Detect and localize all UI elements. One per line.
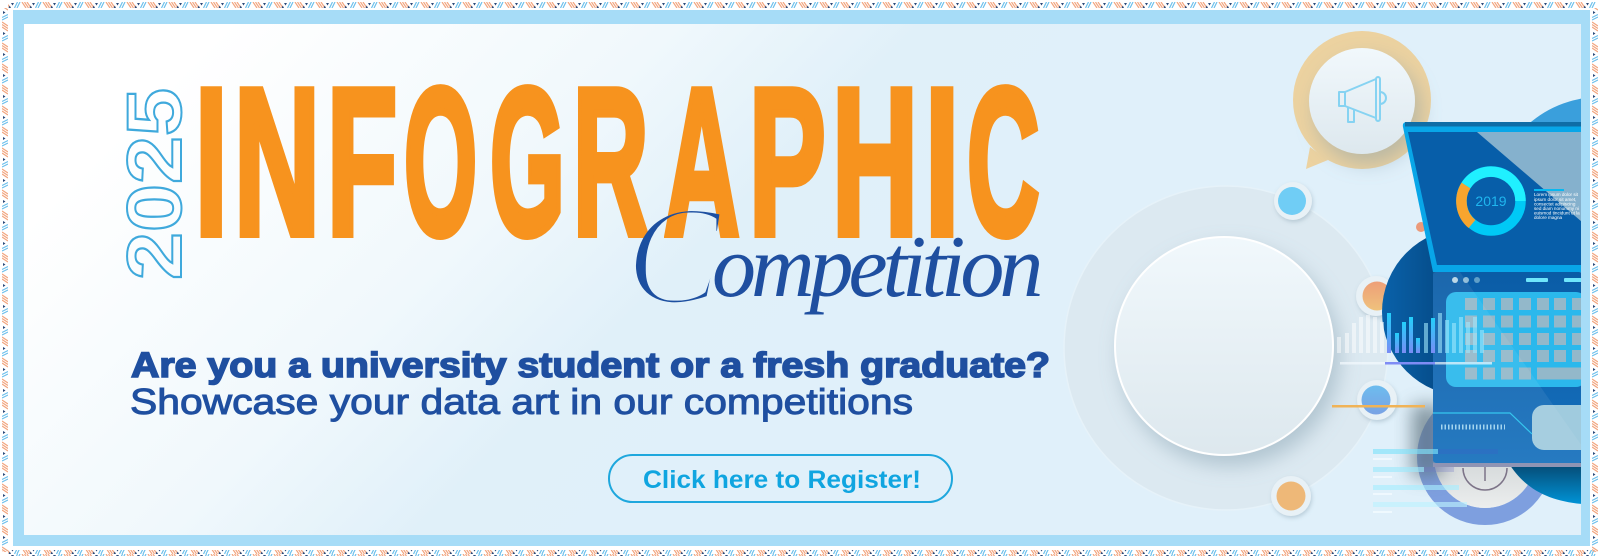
base reflection bbox=[1433, 272, 1582, 463]
large concentric disc bbox=[1064, 186, 1388, 510]
timeline dot: blue bbox=[1274, 182, 1312, 220]
screen caption: sed diam nonummy ni bbox=[1534, 206, 1579, 211]
screen caption: consectet adipiscing bbox=[1534, 202, 1576, 206]
timeline dot: mid blue bbox=[1357, 380, 1397, 420]
laptop screen bbox=[1403, 122, 1582, 272]
year 2025 outlined: 2025 bbox=[112, 88, 198, 280]
peach sliver bbox=[1416, 222, 1424, 232]
screen caption: ipsum dolor sit amet, bbox=[1534, 197, 1576, 202]
text line: showcase: Showcase your data art in our competitions bbox=[130, 381, 913, 422]
speech bubble with megaphone bbox=[1293, 31, 1431, 169]
laptop bbox=[1332, 122, 1592, 513]
timeline dot: orange bbox=[1271, 476, 1311, 516]
soft shadow beside laptop bbox=[1412, 405, 1442, 477]
title: INFOGRAPHIC bbox=[195, 46, 1040, 279]
dark shape under laptop bbox=[1508, 462, 1582, 504]
title: INFOGRAPHIC: I bbox=[195, 46, 228, 279]
bar chart overlay bbox=[1337, 313, 1492, 364]
ring behind laptop bbox=[1426, 398, 1544, 516]
trackpad bbox=[1532, 405, 1581, 450]
title: INFOGRAPHIC: I bbox=[925, 46, 959, 279]
heading line: question: Are you a university student or a fresh graduate? bbox=[131, 346, 1050, 385]
title: INFOGRAPHIC: A bbox=[664, 46, 739, 279]
status dots and lights bbox=[1452, 277, 1582, 283]
title: INFOGRAPHIC: G bbox=[490, 46, 565, 279]
title: INFOGRAPHIC: P bbox=[749, 46, 826, 279]
keyboard keys bbox=[1465, 298, 1582, 380]
donut chart 2019 bbox=[1461, 172, 1520, 230]
title: INFOGRAPHIC: H bbox=[832, 46, 918, 279]
top blue blob bbox=[1531, 98, 1581, 273]
timeline dot: peach bbox=[1356, 277, 1387, 320]
screen caption: Lorem ipsum dolor sit bbox=[1534, 192, 1579, 197]
screen caption: dolore magna bbox=[1534, 215, 1563, 220]
title: INFOGRAPHIC: R bbox=[573, 46, 648, 279]
screen caption bbox=[1534, 189, 1580, 220]
title: INFOGRAPHIC: N bbox=[234, 46, 320, 279]
icon: megaphone bbox=[1339, 77, 1386, 122]
subtitle: Competition: C bbox=[626, 176, 723, 334]
title: INFOGRAPHIC: C bbox=[967, 46, 1039, 279]
button: register: Click here to Register! bbox=[643, 466, 921, 494]
donut chart 2019: 2019 bbox=[1475, 193, 1507, 209]
orange accent line bbox=[1332, 405, 1425, 408]
title: INFOGRAPHIC: F bbox=[327, 46, 397, 279]
title: INFOGRAPHIC: O bbox=[404, 46, 478, 279]
horizontal data lines bbox=[1373, 449, 1467, 513]
subtitle: Competition: ompetition bbox=[712, 219, 1040, 316]
dark blue blob bbox=[1382, 238, 1436, 390]
illustration bbox=[1064, 31, 1600, 516]
screen caption: euismod tincidunt ut la bbox=[1534, 210, 1580, 216]
laptop base bbox=[1433, 272, 1592, 467]
button: register bbox=[609, 455, 952, 502]
